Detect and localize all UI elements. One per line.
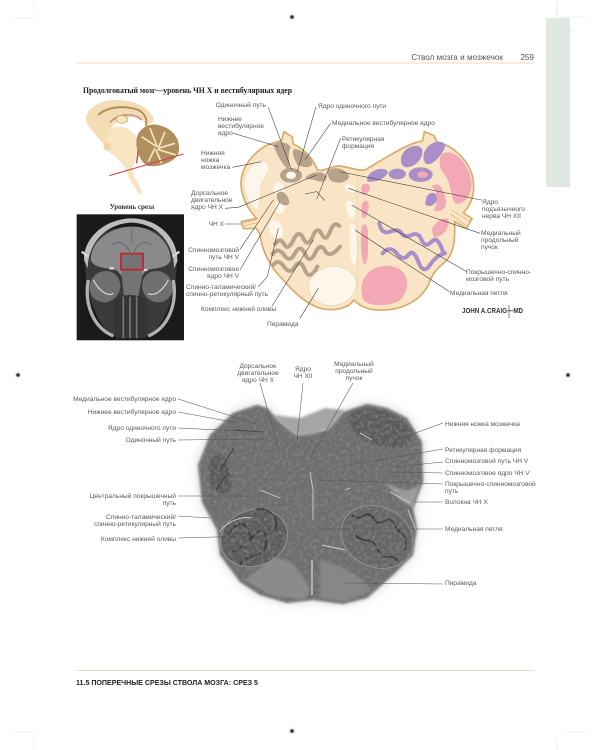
running header: Ствол мозга и мозжечок <box>411 53 503 62</box>
labels: histology, right: Ретикулярная формация <box>445 447 522 454</box>
illustrator signature <box>462 305 523 318</box>
labels: brainstem diagram, left: Спинномозговой <box>188 246 239 254</box>
outline <box>241 132 474 310</box>
labels: brainstem diagram, right: Медиальная петля <box>450 290 508 297</box>
labels: brainstem diagram, right: Ретикулярная <box>342 136 385 143</box>
labels: brainstem diagram, right: формация <box>342 143 374 150</box>
labels: brainstem diagram, right: нерва ЧН XII <box>482 213 521 220</box>
section title: Продолговатый мозг—уровень ЧН X и вестибулярных ядер <box>83 86 293 95</box>
labels: brainstem diagram, right: продольный <box>481 236 519 244</box>
labels: histology, left: спинно-ретикулярный путь <box>94 520 177 528</box>
left pyramid and medial tracts <box>306 263 359 308</box>
labels: brainstem diagram, left: вестибулярное <box>218 122 264 130</box>
labels: brainstem diagram, left: мозжечка <box>201 164 230 171</box>
labels: histology, top: Дорсальное <box>239 363 277 370</box>
labels: histology, left <box>73 395 177 543</box>
labels: brainstem diagram, right: Покрышечно-спинно- <box>466 269 531 276</box>
labels: brainstem diagram, left: Нижняя <box>201 150 225 157</box>
MRI scan with red box <box>77 214 184 340</box>
labels: brainstem diagram, left: спинно-ретикулярный путь <box>186 290 268 298</box>
lighter upper regions <box>272 408 345 435</box>
labels: brainstem diagram, left: Нижнее <box>218 116 242 123</box>
pale fibres and midline raphe <box>220 433 416 550</box>
registration mark: top <box>288 13 296 21</box>
labels: histology, top: ядро ЧН X <box>242 377 275 384</box>
labels: brainstem diagram, right: Медиальное вестибулярное ядро <box>332 119 435 127</box>
labels: histology, right: путь <box>445 488 459 495</box>
labels: histology, right: Медиальная петля <box>445 526 503 533</box>
labels: histology, left: Центральный покрышечный <box>90 492 176 500</box>
labels: brainstem diagram, right: Медиальный <box>481 229 521 237</box>
labels: histology, right: Покрышечно-спинномозговой <box>445 480 536 488</box>
left olive <box>212 500 296 576</box>
labels: brainstem diagram, right: пучок <box>481 244 498 251</box>
left inferior olive <box>273 224 340 275</box>
brainstem cross-section diagram <box>241 132 474 310</box>
labels: brainstem diagram, right: Ядро <box>482 199 498 206</box>
green side tab <box>546 18 570 187</box>
labels: histology, top: пучок <box>346 375 363 382</box>
labels: histology, left: Медиальное вестибулярное ядро <box>73 395 176 403</box>
labels: brainstem diagram, right: мозговой путь <box>466 275 510 283</box>
right pink tracts <box>361 152 472 305</box>
labels: brainstem diagram, left: Дорсальное <box>191 190 228 197</box>
registration mark: bottom <box>288 727 296 735</box>
illustrator signature: JOHN A.CRAIG—MD <box>462 308 523 315</box>
labels: brainstem diagram, left: ядро ЧН V <box>207 273 240 280</box>
labels: brainstem diagram, left: двигательное <box>191 197 233 204</box>
labels: histology, top: Ядро <box>295 366 311 373</box>
nerve rootlets <box>243 210 470 226</box>
labels: histology, top <box>237 360 374 384</box>
labels: brainstem diagram, left: ядро ЧН X <box>191 204 224 211</box>
labels: brainstem diagram, right <box>318 103 531 297</box>
labels: brainstem diagram, left: ножка <box>201 157 220 164</box>
midline <box>356 177 358 303</box>
labels: histology, top: продольный <box>335 367 373 375</box>
labels: brainstem diagram, left: Комплекс нижней оливы <box>201 305 276 313</box>
labels: histology, top: ЧН XII <box>293 373 313 380</box>
labels: histology, right <box>445 421 536 587</box>
labels: histology, left: Одиночный путь <box>126 436 177 444</box>
labels: brainstem diagram, left <box>186 101 299 328</box>
labels: brainstem diagram, left: ЧН X <box>209 221 225 228</box>
labels: brainstem diagram, left: Одиночный путь <box>216 101 267 109</box>
histological section photograph <box>198 404 423 604</box>
tissue grain <box>198 404 423 604</box>
labels: histology, left: Спинно-таламический/ <box>106 513 176 521</box>
labels: histology, right: Волокна ЧН X <box>445 499 489 506</box>
labels: brainstem diagram, left: ядро <box>218 130 233 137</box>
labels: histology, right: Спинномозговой путь ЧН V <box>445 457 529 465</box>
right olive <box>331 494 423 580</box>
labels: histology, right: Пирамида <box>445 580 477 587</box>
left tan nuclei <box>273 142 349 205</box>
right purple nuclei <box>367 142 445 206</box>
labels: histology, left: путь <box>163 500 177 507</box>
labels: brainstem diagram, right: Ядро одиночного пути <box>318 103 386 110</box>
labels: histology, right: Нижняя ножка мозжечка <box>445 421 520 428</box>
labels: brainstem diagram, right: подъязычного <box>482 206 525 213</box>
labels: brainstem diagram, left: Спинно-таламический/ <box>186 283 256 291</box>
left white tracts <box>244 160 269 211</box>
leader lines: brainstem diagram <box>225 107 482 318</box>
labels: histology, top: двигательное <box>237 370 279 377</box>
labels: histology, top: Медиальный <box>334 360 374 368</box>
registration mark: right <box>564 371 572 379</box>
dark upper right region <box>349 408 412 448</box>
running header <box>76 53 534 63</box>
right inferior olive <box>379 223 445 269</box>
labels: brainstem diagram, left: Пирамида <box>267 321 299 328</box>
labels: histology, right: Спинномозговое ядро ЧН V <box>445 470 530 477</box>
icon: sagittal brain with section level <box>86 100 183 195</box>
running header: 259 <box>520 53 534 62</box>
leader lines: histology <box>178 383 443 584</box>
caption: section level: Уровень среза <box>110 203 155 211</box>
labels: histology, left: Ядро одиночного пути <box>108 425 176 432</box>
registration mark: left <box>14 371 22 379</box>
labels: brainstem diagram, left: Спинномозговое <box>188 266 239 273</box>
footer: 11.5 ПОПЕРЕЧНЫЕ СРЕЗЫ СТВОЛА МОЗГА: СРЕЗ 5 <box>76 678 258 687</box>
labels: brainstem diagram, left: путь ЧН V <box>208 254 240 261</box>
labels: histology, left: Комплекс нижней оливы <box>101 535 176 543</box>
labels: histology, left: Нижнее вестибулярное ядро <box>88 408 176 416</box>
